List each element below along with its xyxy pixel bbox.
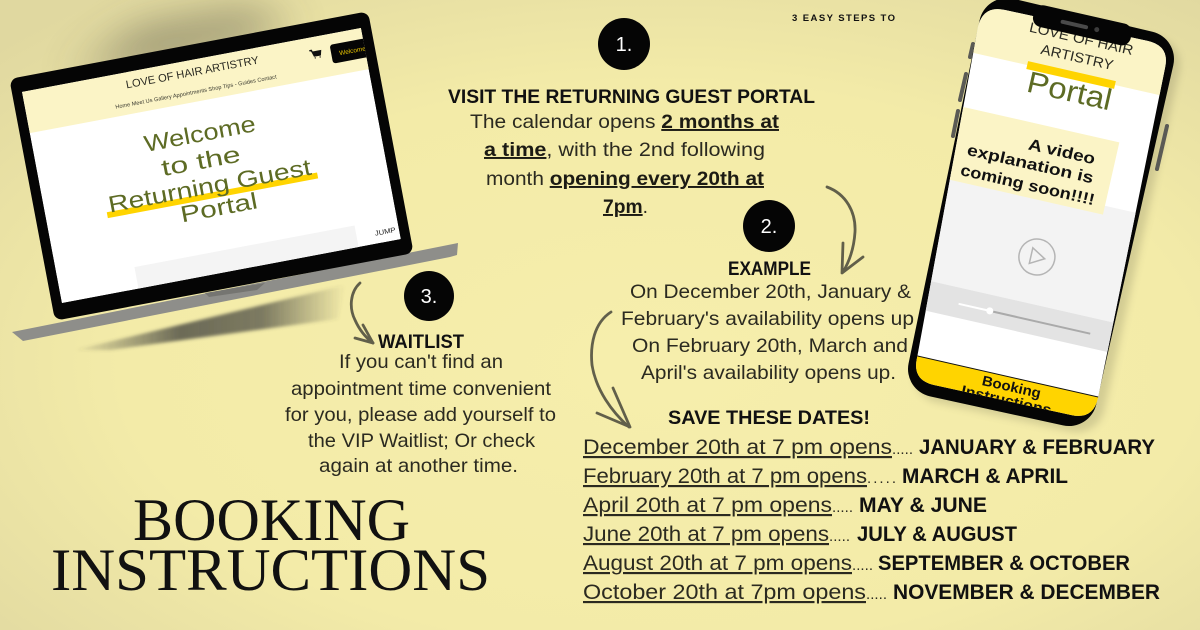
save these dates heading: SAVE THESE DATES! [668, 408, 870, 429]
callout band: explanation is [965, 142, 1095, 187]
date row 2: MARCH & APRIL [902, 464, 1068, 488]
step 2 body: April's availability opens up. [641, 362, 896, 384]
video player [931, 171, 1136, 322]
laptop screen [9, 10, 420, 321]
date row 4 [583, 522, 1017, 546]
date row 5: SEPTEMBER & OCTOBER [878, 551, 1130, 575]
step 1 body: The calendar opens 2 months at [470, 111, 780, 133]
arrow: step 1 to step 2 [827, 187, 863, 273]
callout band: coming soon!!!! [959, 162, 1096, 209]
step 3 body: the VIP Waitlist; Or check [308, 430, 535, 452]
step 2 circle [743, 200, 795, 252]
date row 4: ..... [829, 528, 850, 545]
date row 6: NOVEMBER & DECEMBER [893, 580, 1160, 604]
phone brand name: ARTISTRY [1039, 41, 1116, 73]
date row 6: October 20th at 7pm opens [583, 580, 866, 604]
date row 4: JULY & AUGUST [857, 522, 1017, 546]
welcome button [330, 38, 366, 64]
welcome button: Welcome [339, 45, 367, 57]
step 3 body: appointment time convenient [291, 378, 552, 400]
date row 5: August 20th at 7 pm opens [583, 551, 852, 575]
phone screen [916, 9, 1166, 416]
date row 3: ..... [832, 499, 853, 516]
heading: welcome: Welcome [142, 110, 258, 157]
step 2 body: On February 20th, March and [632, 335, 908, 357]
website header [22, 28, 369, 133]
date row 1: December 20th at 7 pm opens [583, 435, 892, 459]
laptop shadow top [70, 12, 295, 80]
step 2 circle: 2. [761, 216, 777, 238]
arrow: waitlist [351, 283, 373, 343]
phone page [916, 9, 1166, 416]
date row 5 [583, 551, 1130, 575]
date row 6: ..... [866, 586, 887, 603]
laptop hinge notch [205, 283, 265, 297]
step 2 body: On December 20th, January & [630, 281, 911, 303]
video slider [958, 303, 1090, 334]
step 2 body [621, 281, 914, 384]
date row 3: April 20th at 7 pm opens [583, 493, 832, 517]
date row 2: February 20th at 7 pm opens [583, 464, 867, 488]
step 3 body: again at another time. [319, 455, 518, 477]
laptop lid [9, 11, 414, 321]
date row 4: June 20th at 7 pm opens [583, 522, 829, 546]
laptop shadow bottom [75, 285, 345, 350]
title: INSTRUCTIONS [51, 537, 490, 603]
arrow: step 2 to dates [592, 312, 630, 427]
small heading: 3 easy steps: 3 EASY STEPS TO [792, 13, 895, 24]
phone header [973, 9, 1166, 95]
brand name: LOVE OF HAIR ARTISTRY [125, 54, 260, 91]
phone notch [1031, 3, 1134, 47]
heading: welcome: to the [159, 141, 243, 181]
phone shadow [942, 32, 1152, 404]
phone mockup [908, 0, 1182, 434]
dates list [583, 435, 1160, 604]
date row 2: ..... [867, 470, 896, 487]
step 2 body: February's availability opens up [621, 308, 914, 330]
step 3 body: for you, please add yourself to [285, 404, 556, 426]
title [51, 487, 490, 603]
highlight stroke [107, 173, 318, 218]
phone highlight stroke [1026, 61, 1116, 89]
step 1 body: a time , with the 2nd following [484, 139, 765, 161]
step 1 body [470, 111, 780, 218]
booking instructions bar: Booking [981, 372, 1043, 401]
step 3 text [285, 332, 556, 477]
title: BOOKING [133, 487, 410, 553]
booking instructions bar: Instructions [960, 382, 1053, 418]
step 2 heading: EXAMPLE [728, 259, 811, 280]
date row 1: ..... [892, 441, 913, 458]
step 1 body: month opening every 20th at [486, 168, 765, 190]
icon: cart [309, 49, 322, 59]
step 3 heading: WAITLIST [378, 332, 464, 353]
phone brand name: LOVE OF HAIR [1028, 19, 1135, 58]
step 2 text [621, 259, 914, 384]
step 1 text [448, 87, 815, 218]
step 1 circle [598, 18, 650, 70]
date row 2 [583, 464, 1068, 488]
laptop base [12, 243, 458, 341]
date row 3: MAY & JUNE [859, 493, 987, 517]
navigation: Home Meet Us Gallery Appointments Shop Tips - Guides Contact [115, 74, 278, 111]
phone portal heading: Portal [1024, 66, 1115, 117]
step 3 circle: 3. [421, 286, 437, 308]
date row 6 [583, 580, 1160, 604]
date row 5: ..... [852, 557, 873, 574]
step 1 body: 7pm. [603, 196, 648, 218]
date row 1: JANUARY & FEBRUARY [919, 435, 1155, 459]
video controls band [926, 281, 1114, 352]
jump label: JUMP [374, 227, 397, 238]
laptop mockup [9, 10, 458, 341]
phone brand name [1030, 22, 1133, 69]
date row 3 [583, 493, 987, 517]
booking instructions bar [916, 356, 1098, 416]
step 1 circle: 1. [616, 34, 632, 56]
callout band: A video [1027, 137, 1097, 168]
callout band [950, 107, 1120, 214]
step 1 heading: VISIT THE RETURNING GUEST PORTAL [448, 87, 815, 108]
step 3 body [285, 351, 556, 477]
icon: play button [1018, 238, 1056, 276]
phone side buttons [953, 44, 1167, 169]
phone body [936, 26, 1146, 398]
heading: welcome: Portal [178, 187, 260, 227]
heading: welcome [109, 120, 312, 222]
date row 1 [583, 435, 1155, 459]
step 3 body: If you can't find an [339, 351, 503, 373]
website page [22, 28, 401, 303]
heading: welcome: Returning Guest [106, 154, 314, 218]
faded block [134, 225, 359, 289]
step 3 circle [404, 271, 454, 321]
